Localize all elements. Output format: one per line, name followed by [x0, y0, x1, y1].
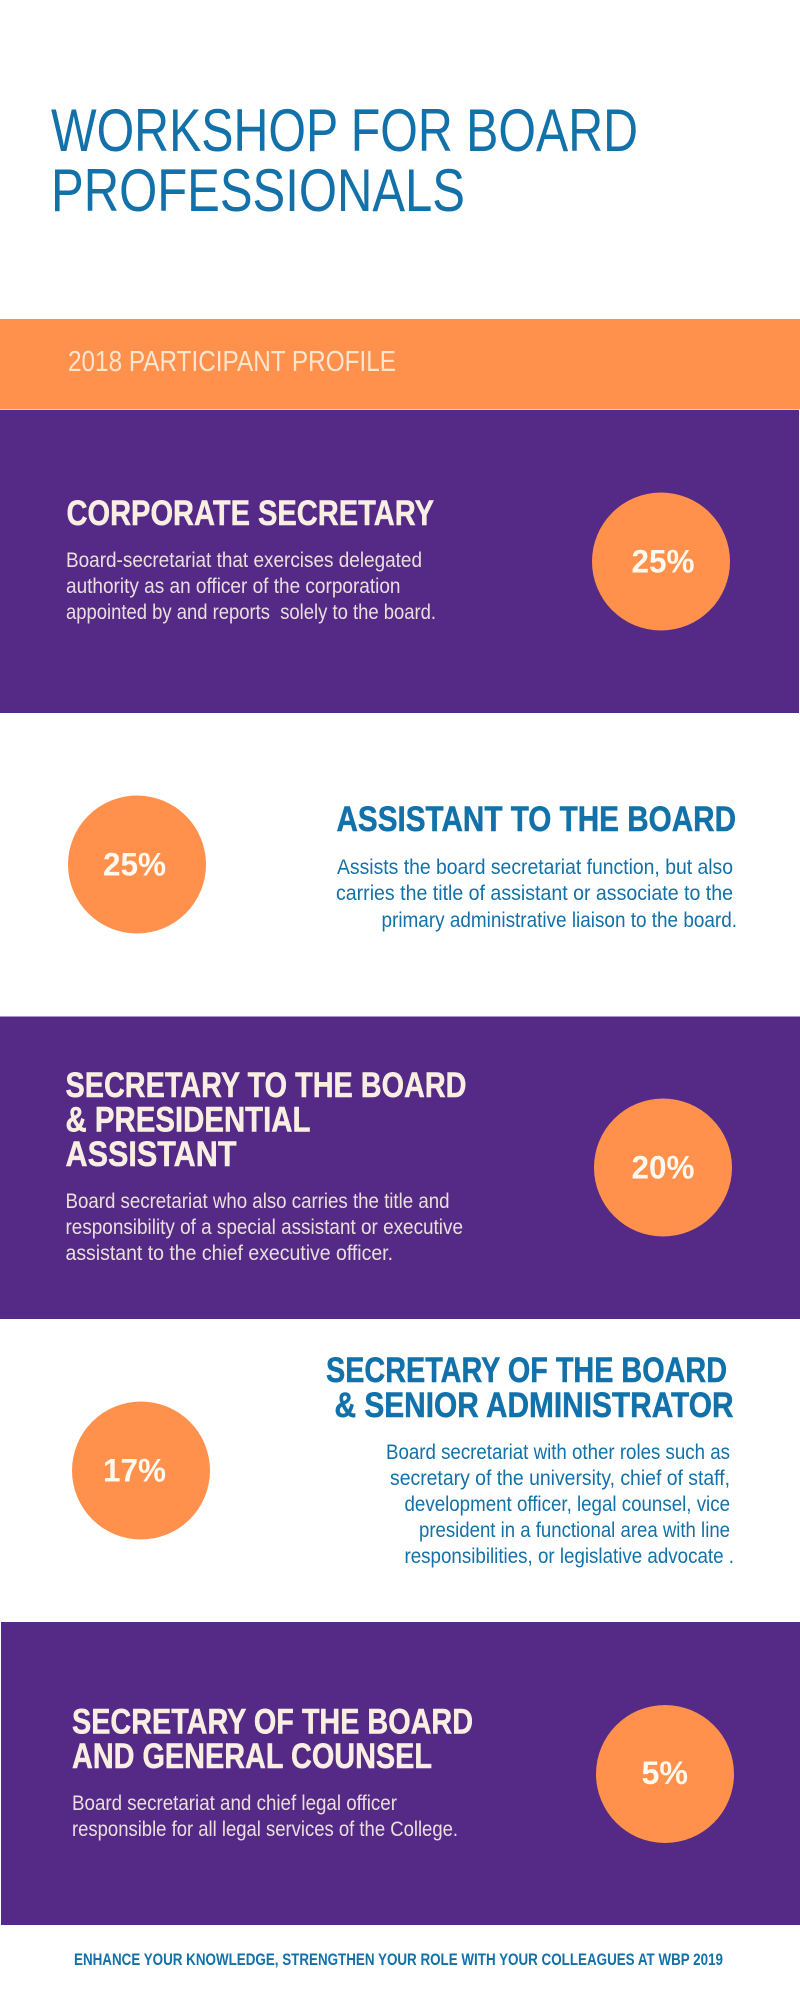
description [72, 1792, 458, 1841]
description: development officer, legal counsel, vice [404, 1493, 730, 1516]
banner: 2018 participant profile [0, 319, 800, 410]
percentage circle: 5% [596, 1705, 734, 1843]
description: appointed by and reports solely to the board. [66, 601, 436, 624]
heading: CORPORATE SECRETARY [66, 494, 434, 533]
description: primary administrative liaison to the board. [382, 909, 737, 932]
percentage circle: 17%: 17% [103, 1452, 166, 1488]
panel: assistant to the board [0, 713, 800, 1017]
percentage circle: 25% [68, 796, 206, 934]
description: Board secretariat who also carries the title and [66, 1190, 450, 1213]
percentage circle: 20% [594, 1098, 732, 1236]
description: Board-secretariat that exercises delegated [66, 549, 422, 572]
banner heading: 2018 PARTICIPANT PROFILE [68, 346, 396, 378]
heading: ASSISTANT TO THE BOARD [336, 800, 736, 839]
panel: secretary to the board and presidential assistant [0, 1016, 800, 1319]
heading [326, 1351, 734, 1425]
heading: SECRETARY OF THE BOARD [72, 1702, 473, 1742]
percentage circle: 25%: 25% [632, 544, 694, 580]
description [66, 1190, 463, 1265]
heading: SECRETARY TO THE BOARD [66, 1066, 466, 1105]
description: Assists the board secretariat function, but also [337, 856, 733, 879]
description [66, 549, 436, 624]
heading: & PRESIDENTIAL [66, 1100, 310, 1140]
percentage circle: 20%: 20% [632, 1150, 694, 1186]
description: secretary of the university, chief of staff, [390, 1467, 730, 1490]
description: carries the title of assistant or associate to the [336, 882, 733, 905]
description: assistant to the chief executive officer. [66, 1242, 393, 1265]
title: PROFESSIONALS [51, 157, 465, 224]
heading [72, 1702, 473, 1776]
description: responsible for all legal services of the College. [72, 1818, 458, 1841]
title: WORKSHOP FOR BOARD [51, 97, 638, 164]
heading [66, 1066, 466, 1174]
percentage circle: 25%: 25% [103, 846, 166, 882]
percentage circle: 17% [72, 1402, 210, 1540]
description [336, 856, 737, 932]
panel: corporate secretary [0, 410, 799, 713]
panel: secretary of the board and general counsel [1, 1622, 800, 1925]
percentage circle: 5%: 5% [642, 1755, 688, 1791]
panel: secretary of the board and senior administrator [0, 1319, 800, 1622]
heading: & SENIOR ADMINISTRATOR [334, 1386, 734, 1425]
heading: SECRETARY OF THE BOARD [326, 1351, 727, 1390]
description: authority as an officer of the corporation [66, 575, 400, 598]
title [51, 97, 638, 224]
description: president in a functional area with line [419, 1519, 730, 1542]
description [386, 1441, 734, 1568]
description: Board secretariat and chief legal officer [72, 1792, 397, 1815]
description: responsibilities, or legislative advocate . [404, 1545, 734, 1568]
heading: AND GENERAL COUNSEL [72, 1737, 432, 1776]
description: Board secretariat with other roles such as [386, 1441, 730, 1464]
description: responsibility of a special assistant or executive [66, 1216, 463, 1239]
percentage circle: 25% [592, 492, 730, 630]
heading: ASSISTANT [66, 1135, 236, 1174]
